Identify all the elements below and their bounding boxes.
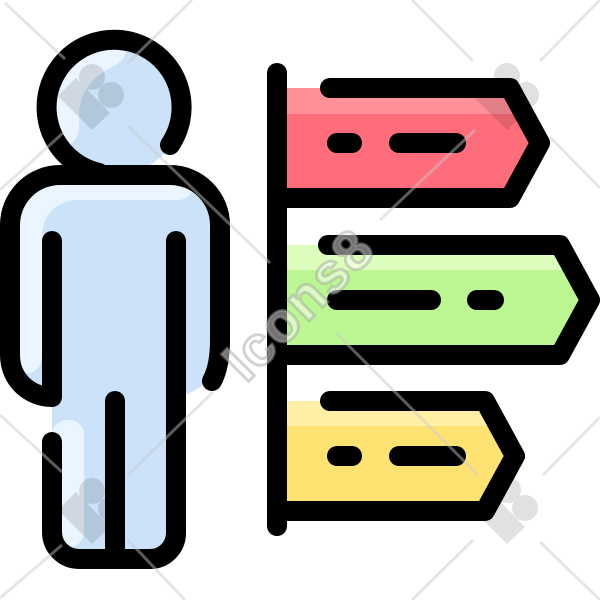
watermark logos xyxy=(58,63,539,544)
sign: green arrow xyxy=(277,245,590,355)
signpost pole xyxy=(267,73,287,526)
person figure xyxy=(10,40,220,559)
watermark text: Icons8 xyxy=(210,217,385,392)
person: body fill xyxy=(10,175,220,559)
sign: yellow arrow xyxy=(277,401,515,511)
person: head fill xyxy=(48,40,182,175)
sign: red arrow xyxy=(277,88,540,198)
person: outline xyxy=(10,40,220,559)
